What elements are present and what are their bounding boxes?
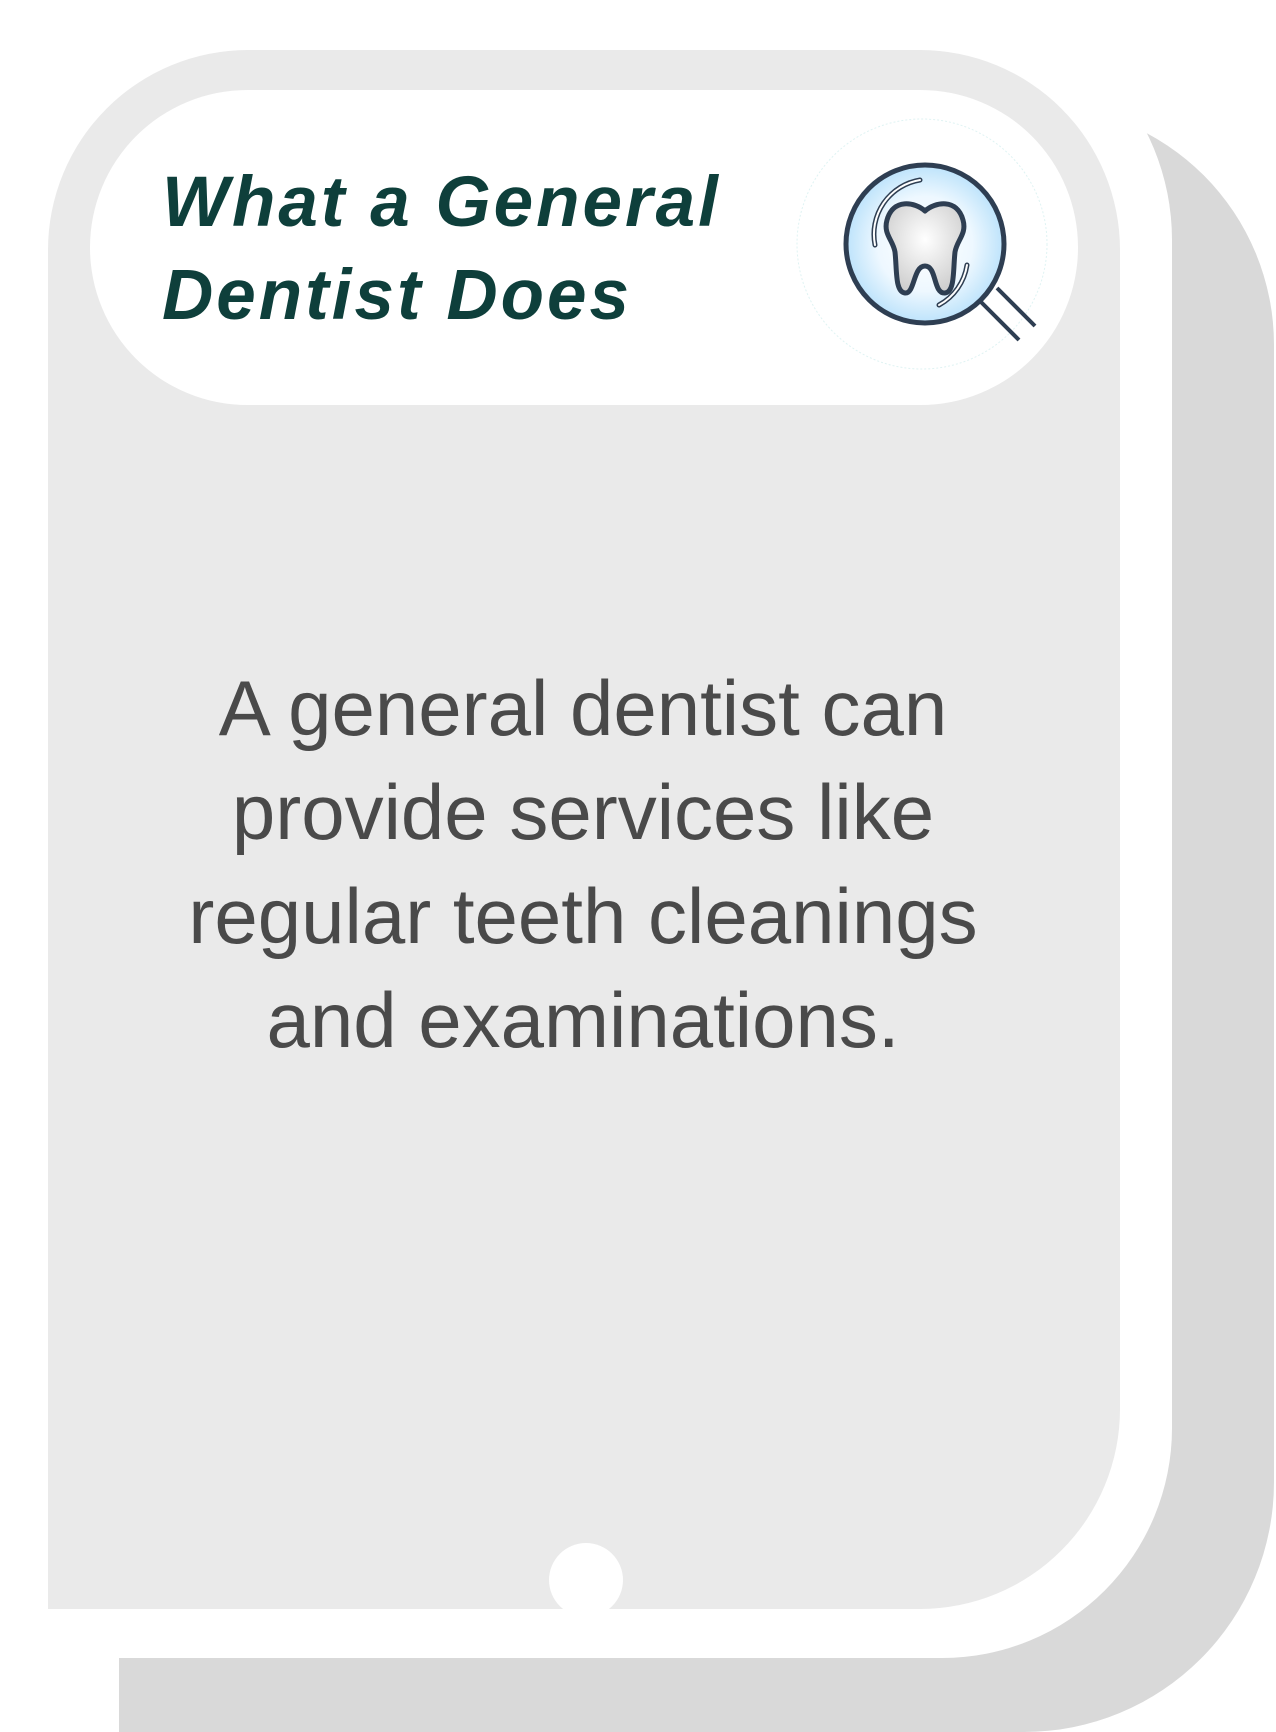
- body text: regular teeth cleanings: [188, 872, 978, 960]
- main panel: [48, 50, 1120, 1609]
- body text: [188, 664, 978, 1064]
- title: Dentist Does: [162, 256, 632, 335]
- bottom hole: [549, 1543, 623, 1617]
- body text: provide services like: [232, 768, 934, 856]
- title: What a General: [162, 163, 721, 242]
- body text: A general dentist can: [219, 664, 947, 752]
- title: [162, 163, 721, 335]
- icon: tooth under magnifier: [796, 118, 1048, 370]
- body text: and examinations.: [266, 976, 900, 1064]
- header pill: [90, 90, 1078, 405]
